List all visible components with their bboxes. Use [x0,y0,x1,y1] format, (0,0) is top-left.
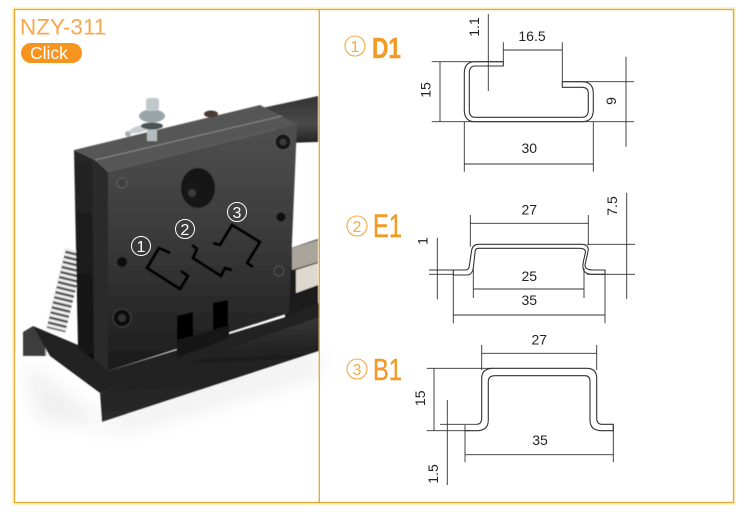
diagram B1 [412,332,613,485]
shadow under base [22,350,319,430]
divider [318,9,320,502]
die label 2 [176,220,194,239]
die label 3: 3 [233,205,242,222]
slot 1 [147,248,188,289]
heading B1: 3 [353,362,362,379]
block left side [74,150,108,371]
profile D1 [464,62,593,122]
heading B1 [347,352,402,387]
base top surface [33,303,319,393]
dimension lines D1 [432,14,634,172]
dimension lines E1 [429,193,635,323]
dimension labels D1 [418,17,619,156]
diagram D1 [418,14,634,172]
slot 2 [192,245,232,276]
dimension labels E1: 1 [414,237,430,245]
heading B1: B1 [373,352,402,387]
back flange of base [23,326,50,356]
profile E1 [453,244,605,275]
dimension labels E1: 25 [522,268,537,284]
block top face [74,105,297,172]
diagram E1 [414,193,635,323]
handle [262,96,318,143]
dimension labels B1 [412,332,548,484]
heading D1 [345,33,401,65]
dimension lines B1 [427,345,613,485]
dimension labels E1: 27 [522,202,537,218]
profile B1 [465,368,613,431]
large round hole [181,168,215,208]
dimension labels B1: 1.5 [425,464,441,484]
die label 2: 2 [181,222,190,239]
dimension labels E1: 7.5 [604,196,620,216]
heading E1 [347,208,402,244]
bolt [125,98,165,141]
top rear screw [204,110,218,118]
heading D1: D1 [372,33,401,65]
dimension labels E1: 35 [522,292,537,308]
spring [46,250,75,356]
bottom notch [177,300,229,358]
title: NZY-311 [20,14,106,40]
photo: rail cutter tool [22,96,319,430]
die label 3 [228,202,246,222]
die label 1 [132,236,150,256]
click button: Click [30,43,68,63]
slot 3 [213,225,260,267]
dimension labels E1 [414,196,620,308]
die label 1: 1 [137,239,146,256]
dimension labels D1: 16.5 [518,28,546,44]
click button [21,43,82,63]
dimension labels B1: 35 [532,432,548,448]
screws and holes [113,134,291,327]
dimension labels B1: 15 [412,390,428,406]
heading D1: 1 [351,39,360,56]
block front face [108,124,297,371]
dimension labels D1: 9 [603,97,619,105]
dimension labels D1: 1.1 [466,17,482,37]
heading E1: E1 [373,208,402,244]
dimension labels D1: 30 [522,140,537,156]
dimension labels B1: 27 [532,332,547,348]
dimension labels D1: 15 [418,82,434,98]
back rail [285,239,318,330]
heading E1: 2 [353,219,362,236]
base front strip [100,317,319,422]
